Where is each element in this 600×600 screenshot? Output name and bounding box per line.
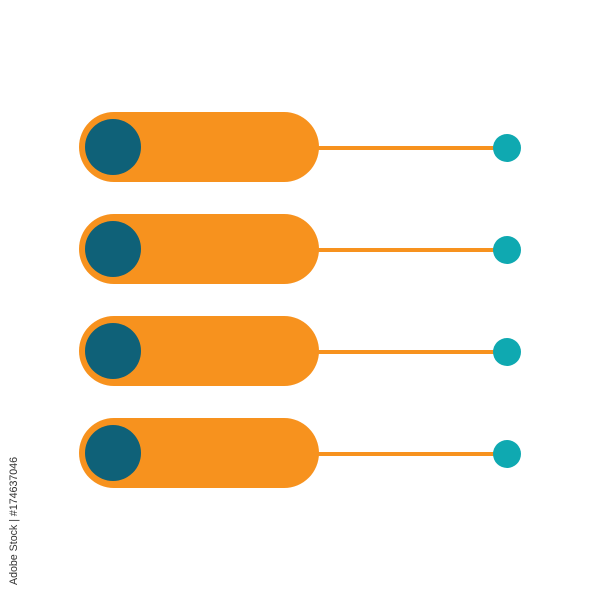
end dot 3 xyxy=(493,338,521,366)
connector line 2 xyxy=(316,248,502,252)
row 2 xyxy=(79,214,521,284)
icon circle 2 xyxy=(85,221,141,277)
connector line 3 xyxy=(316,350,502,354)
stock id text: Adobe Stock | #174637046 xyxy=(8,457,20,585)
pill 4 xyxy=(79,418,319,488)
icon circle 4 xyxy=(85,425,141,481)
pill 3 xyxy=(79,316,319,386)
row 1 xyxy=(79,112,521,182)
end dot 2 xyxy=(493,236,521,264)
row 3 xyxy=(79,316,521,386)
pill 2 xyxy=(79,214,319,284)
pill 1 xyxy=(79,112,319,182)
icon circle 1 xyxy=(85,119,141,175)
icon circle 3 xyxy=(85,323,141,379)
end dot 4 xyxy=(493,440,521,468)
end dot 1 xyxy=(493,134,521,162)
row 4 xyxy=(79,418,521,488)
connector line 4 xyxy=(316,452,502,456)
connector line 1 xyxy=(316,146,502,150)
